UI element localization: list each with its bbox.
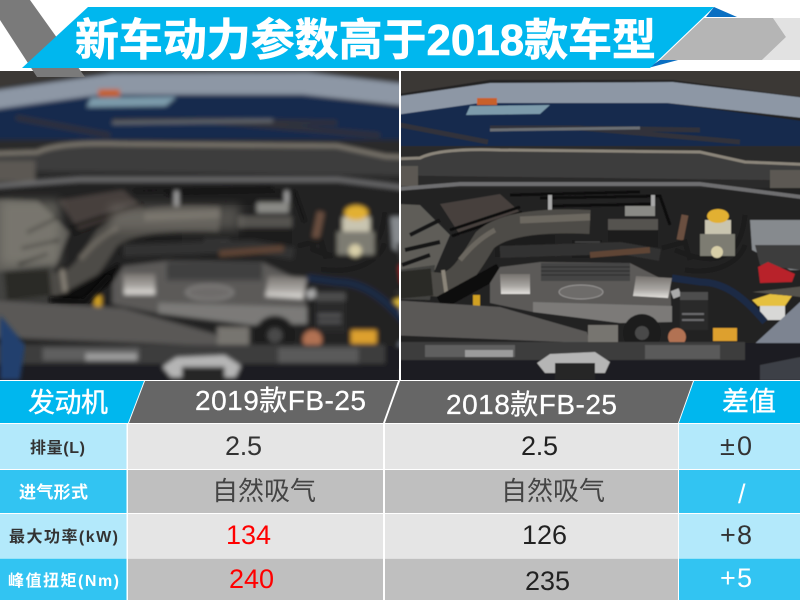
row: displacement: 排量(L) [30,439,85,457]
row: displacement: ±0 [720,431,752,461]
header: 2019 model [129,381,398,423]
row: peak torque [0,558,800,600]
row: max power: 126 [522,520,567,550]
title banner [0,0,800,77]
row: peak torque: 235 [525,566,570,596]
decorative shapes, right [648,7,800,68]
row: intake type: 自然吸气 [212,476,316,506]
row: intake type [0,470,800,513]
row: peak torque: +5 [720,563,752,593]
header: engine: 发动机 [28,388,108,418]
row: max power [0,514,800,558]
title text: 新车动力参数高于2018款车型 [75,16,656,65]
row: max power: +8 [720,520,752,550]
photo: 2018 engine bay [401,71,800,380]
row: peak torque: 240 [229,564,274,594]
header: 2018 model: 2018款FB-25 [446,389,617,420]
row: displacement: 2.5 [521,431,558,461]
row: intake type: 进气形式 [19,483,88,502]
row: peak torque: 峰值扭矩(Nm) [8,571,119,590]
table header row [0,381,800,423]
decorative grey stripes, left [0,0,85,77]
photo: 2019 engine bay (blurred) [0,71,399,380]
comparison table [0,381,800,600]
row: max power: 最大功率(kW) [9,527,118,546]
header: difference [679,381,800,423]
row: max power: 134 [226,520,271,550]
row: intake type: / [738,479,746,509]
row: intake type: 自然吸气 [501,476,605,506]
header: difference: 差值 [722,387,776,417]
header: 2019 model: 2019款FB-25 [195,385,366,416]
header: engine [0,381,144,423]
row: displacement: 2.5 [225,431,262,461]
row: displacement [0,424,800,469]
header: 2018 model [385,381,693,423]
banner ribbon [22,7,714,68]
